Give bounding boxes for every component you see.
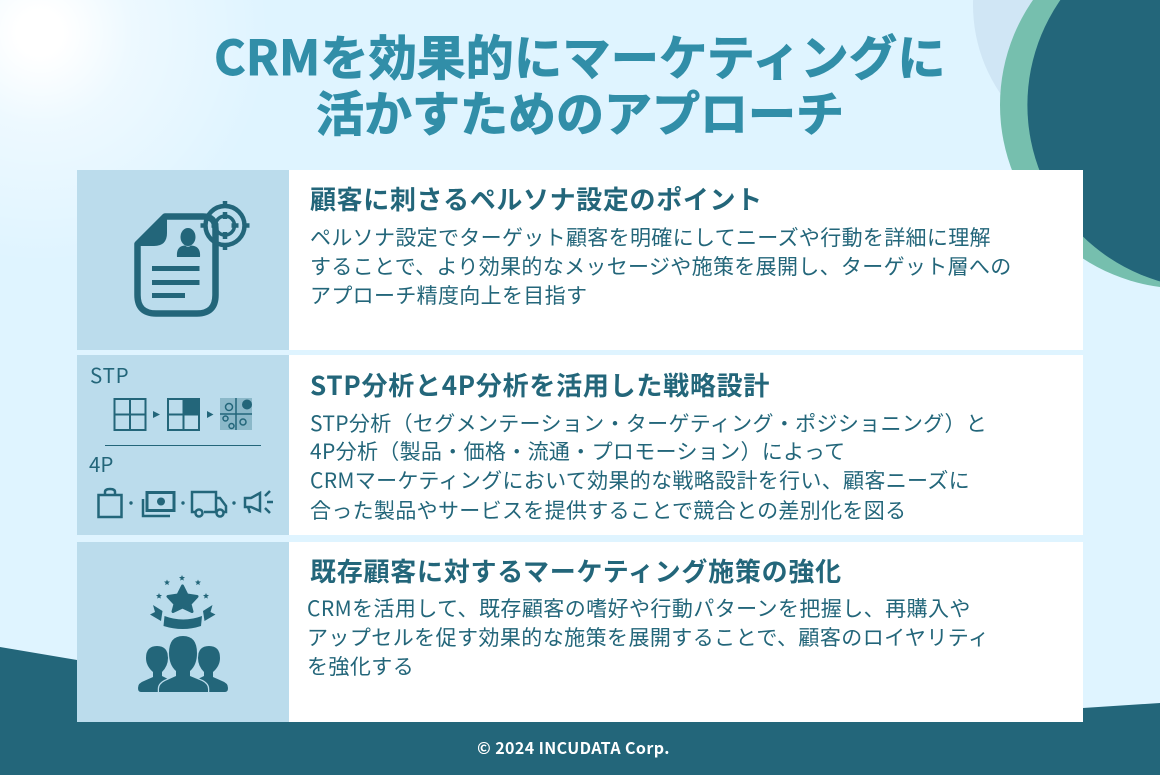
- icons: STP and 4P: [77, 355, 289, 535]
- body text: CRMを活用して、既存顧客の嗜好や行動パターンを把握し、再購入や: [307, 593, 971, 623]
- title: CRMを効果的にマーケティングに: [214, 19, 946, 89]
- icons: STP and 4P: 4P: [89, 448, 113, 478]
- footer copyright: © 2024 INCUDATA Corp.: [477, 735, 670, 759]
- body text: 合った製品やサービスを提供することで競合との差別化を図る: [310, 495, 906, 525]
- panel: persona: [77, 170, 1083, 350]
- title: [214, 19, 946, 145]
- icons: STP and 4P: STP: [90, 359, 129, 389]
- body text: [307, 593, 989, 681]
- icon: customers with star and ribbon: [77, 542, 289, 722]
- title: 活かすためのアプローチ: [316, 75, 844, 145]
- body text: [310, 408, 987, 525]
- body text: CRMマーケティングにおいて効果的な戦略設計を行い、顧客ニーズに: [310, 465, 970, 495]
- body text: アップセルを促す効果的な施策を展開することで、顧客のロイヤリティ: [307, 622, 989, 652]
- panel: STP and 4P: [77, 355, 1083, 535]
- icon: persona document with target: [77, 170, 289, 350]
- body text: [310, 222, 1012, 310]
- body text: STP分析（セグメンテーション・ターゲティング・ポジショニング）と: [310, 408, 987, 438]
- body text: することで、より効果的なメッセージや施策を展開し、ターゲット層への: [310, 251, 1012, 281]
- body text: を強化する: [307, 651, 414, 681]
- heading: 既存顧客に対するマーケティング施策の強化: [310, 552, 842, 589]
- body text: アプローチ精度向上を目指す: [310, 280, 587, 310]
- panel: existing customers: [77, 542, 1083, 722]
- heading: 顧客に刺さるペルソナ設定のポイント: [310, 180, 763, 217]
- body text: ペルソナ設定でターゲット顧客を明確にしてニーズや行動を詳細に理解: [310, 222, 991, 252]
- body text: 4P分析（製品・価格・流通・プロモーション）によって: [310, 436, 845, 466]
- heading: STP分析と4P分析を活用した戦略設計: [310, 366, 770, 403]
